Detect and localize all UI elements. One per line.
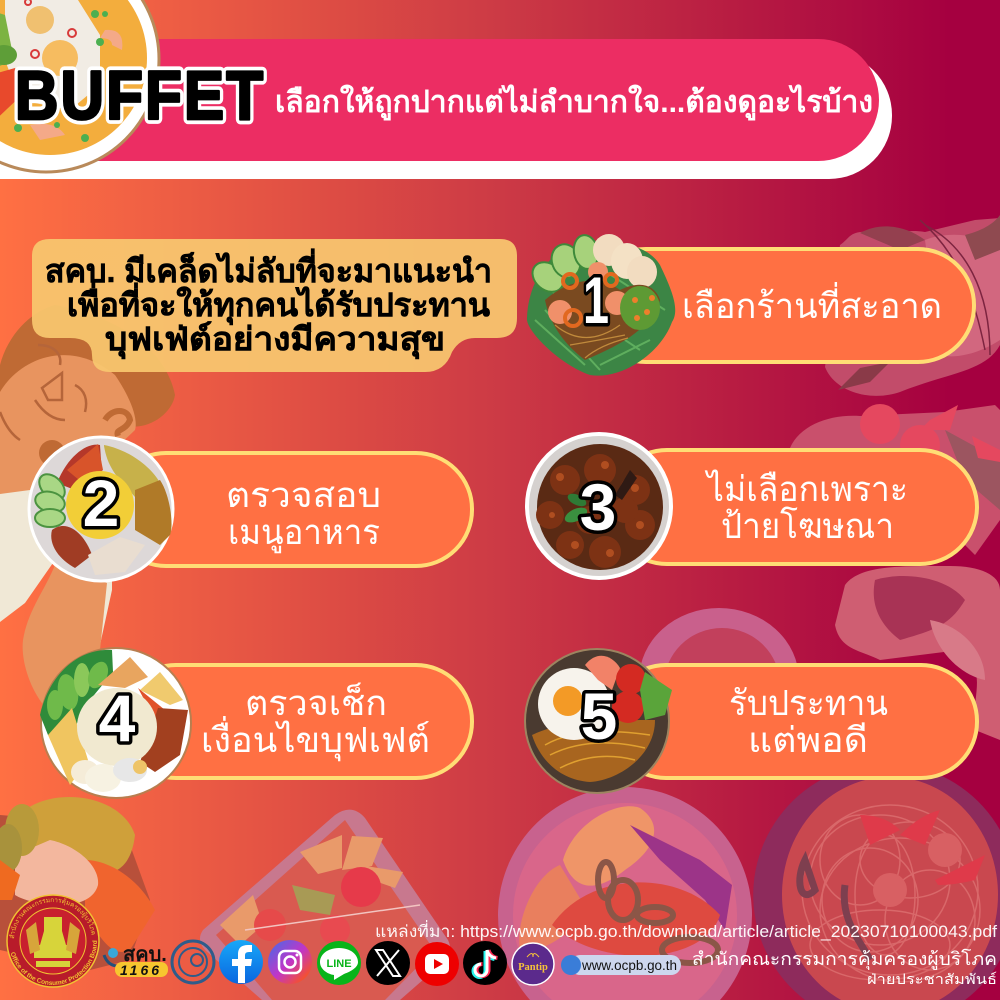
icon: X <box>366 941 410 985</box>
item 2 <box>29 437 472 581</box>
dish 1: banana leaf <box>527 233 675 376</box>
logo: hotline 1166 <box>104 944 168 978</box>
title: BUFFET: BUFFET <box>15 57 263 134</box>
subtitle: เลือกให้ถูกปากแต่ไม่ลำบากใจ...ต้องดูอะไรบ้าง <box>275 84 873 121</box>
background: watercolor plate with fruit <box>498 787 752 1000</box>
logo: OCPB ring <box>172 941 214 983</box>
icon: youtube <box>415 942 459 986</box>
background: watercolor food, pizza slice <box>835 566 1000 740</box>
person illustration <box>0 305 175 720</box>
pill 3 <box>610 450 977 564</box>
item 4 <box>40 648 472 798</box>
organisation name: สำนักคณะกรรมการคุ้มครองผู้บริโภค <box>692 948 997 970</box>
icon: instagram <box>268 940 312 984</box>
icon: pantip: Pantip <box>518 962 548 973</box>
label 3: ไม่เลือกเพราะ <box>704 469 908 509</box>
number 3: 3 <box>580 470 616 544</box>
pill 1 <box>590 249 974 362</box>
header banner <box>0 39 892 179</box>
label 2: ตรวจสอบ <box>226 476 381 515</box>
icon: facebook <box>219 940 263 984</box>
label 2: เมนูอาหาร <box>228 513 380 553</box>
label 5 <box>729 684 888 760</box>
logo: hotline 1166: สคบ. <box>123 944 167 966</box>
item 1 <box>527 233 974 376</box>
source text: แหล่งที่มา: https://www.ocpb.go.th/download/article/article_20230710100043.pdf <box>375 920 997 941</box>
website badge <box>561 955 681 975</box>
label 4 <box>201 682 430 761</box>
number 4: 4 <box>99 681 136 755</box>
pill 5 <box>610 665 977 778</box>
dish 4: rice plate <box>40 648 191 798</box>
label 3: ป้ายโฆษณา <box>721 506 894 546</box>
label 3 <box>704 469 908 546</box>
dish 2: yellow rice plate <box>29 437 173 581</box>
callout: intro text: สคบ. มีเคล็ดไม่ลับที่จะมาแนะนำ <box>45 248 492 289</box>
pill 2 <box>110 453 472 566</box>
dish 3: braised meat bowl <box>527 434 671 578</box>
callout: intro text: เพื่อที่จะให้ทุกคนได้รับประทาน <box>67 282 490 326</box>
logo: office of the consumer protection board: Office of the Consumer Protection Board <box>11 940 97 985</box>
title: BUFFET: BUFFET <box>15 57 263 134</box>
label 4: เงื่อนไขบุฟเฟต์ <box>201 716 430 761</box>
department name: ฝ่ายประชาสัมพันธ์ <box>867 971 997 987</box>
callout: intro text <box>32 239 517 372</box>
label 2 <box>226 476 381 553</box>
callout: intro text: บุฟเฟ่ต์อย่างมีความสุข <box>105 321 445 360</box>
background: watercolor salad box <box>200 810 450 1000</box>
logo: hotline 1166: 1166 <box>120 962 162 978</box>
number 1: 1 <box>583 263 609 337</box>
icon: line: LINE <box>326 958 352 970</box>
label 4: ตรวจเช็ก <box>245 682 387 723</box>
logo: office of the consumer protection board <box>6 894 100 988</box>
icon: tiktok <box>463 941 507 985</box>
number 5: 5 <box>581 679 617 753</box>
website badge: www.ocpb.go.th <box>581 958 677 973</box>
pill 4 <box>120 665 472 778</box>
background: watercolor food, upper right <box>825 215 1000 396</box>
background: watercolor spaghetti plate <box>753 763 1000 1000</box>
logo: office of the consumer protection board: สำนักงานคณะกรรมการคุ้มครองผู้บริโภค <box>9 898 95 938</box>
label 5: แต่พอดี <box>748 721 868 760</box>
illustration: fried rice plate <box>0 0 159 172</box>
item 3 <box>527 434 977 578</box>
background: food plate, lower left <box>0 797 155 970</box>
icon: pantip <box>512 943 554 985</box>
background: watercolor food, tomato dish <box>790 404 1000 555</box>
label 1: เลือกร้านที่สะอาด <box>682 282 942 326</box>
dish 5: fried noodles with egg <box>525 649 672 793</box>
icon: line <box>317 941 361 985</box>
item 5 <box>525 649 977 793</box>
number 2: 2 <box>83 466 119 540</box>
background: watercolor bowl <box>639 608 799 752</box>
label 5: รับประทาน <box>729 684 888 723</box>
banner white shadow <box>0 52 892 179</box>
banner pink bar <box>0 39 879 161</box>
